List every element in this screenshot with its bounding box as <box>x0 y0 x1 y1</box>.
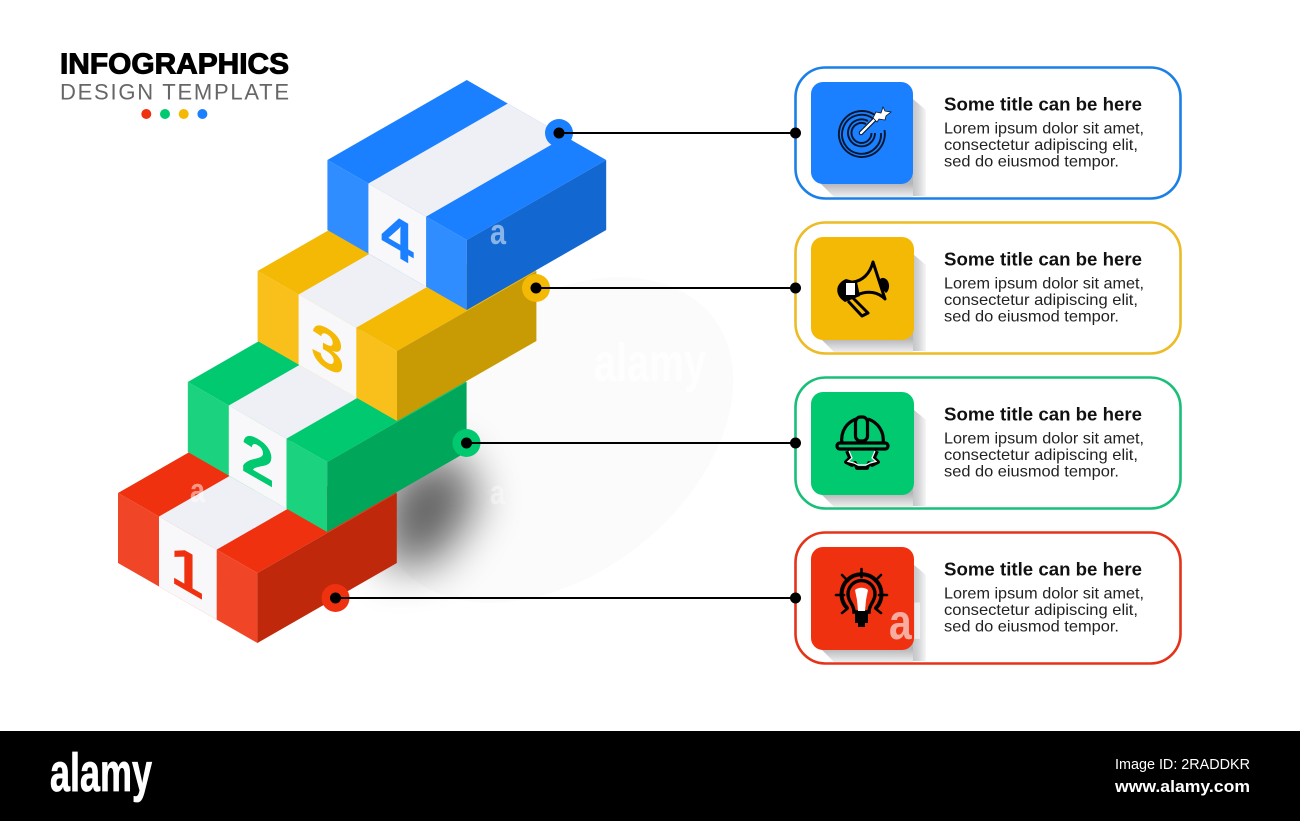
connector: step 2 <box>452 429 801 457</box>
connector: step 1 <box>322 584 801 612</box>
number 2: 2 <box>241 419 274 501</box>
number 3: 3 <box>311 308 344 391</box>
background shadow of stairs <box>314 210 796 670</box>
icon tile: megaphone <box>811 237 914 340</box>
card 2 body text <box>944 430 1144 480</box>
colour dots <box>141 109 207 119</box>
icon tile: helmet and gear <box>811 392 914 495</box>
card 2 title: Some title can be here <box>944 404 1142 424</box>
card 4 title: Some title can be here <box>944 94 1142 114</box>
icon tile: target <box>811 82 913 184</box>
card 1 body text: Lorem ipsum dolor sit amet, <box>944 586 1144 602</box>
panel: card 4 blue <box>796 68 1180 198</box>
card 3 body text: consectetur adipiscing elit, <box>944 292 1138 309</box>
card 3 body text <box>944 276 1144 326</box>
card 2 body text: Lorem ipsum dolor sit amet, <box>944 430 1144 448</box>
card 2 body text: sed do eiusmod tempor. <box>944 464 1119 480</box>
stair block 3: yellow <box>258 191 536 421</box>
tile shadow <box>813 394 926 507</box>
watermark letters on stairs: a <box>490 474 506 512</box>
tile shadow <box>813 549 926 662</box>
card 3 body text: sed do eiusmod tempor. <box>944 308 1119 326</box>
tile shadow <box>813 84 926 197</box>
card 4 body text: consectetur adipiscing elit, <box>944 137 1138 154</box>
panel: card 3 yellow <box>796 222 1180 354</box>
connector: step 3 <box>522 274 801 302</box>
title block <box>60 48 289 119</box>
card 3 title: Some title can be here <box>944 248 1142 270</box>
stair block 4: blue <box>327 80 606 310</box>
card 2 body text: consectetur adipiscing elit, <box>944 447 1138 464</box>
watermark letters on stairs: alamy <box>594 333 706 393</box>
watermark letters on stairs <box>190 211 706 512</box>
card 4 body text: sed do eiusmod tempor. <box>944 154 1119 170</box>
card 4 body text <box>944 120 1144 170</box>
watermark letters on stairs: a <box>190 472 206 510</box>
image id: Image ID: 2RADDKR <box>1115 757 1250 773</box>
number 4: 4 <box>381 197 414 279</box>
footer logo: alamy <box>50 743 152 803</box>
number 1: 1 <box>170 531 204 613</box>
subheading: design template: DESIGN TEMPLATE <box>60 80 289 104</box>
panel: card 2 green <box>796 378 1180 508</box>
tile shadow <box>813 239 926 352</box>
connector: step 4 <box>545 119 801 147</box>
watermark letters on stairs: a <box>490 211 507 252</box>
card 1 title: Some title can be here <box>944 558 1142 580</box>
card 1 body text: consectetur adipiscing elit, <box>944 602 1138 619</box>
stair block 1: red <box>118 413 397 643</box>
icon tile: light bulb <box>811 547 914 650</box>
card 1 body text: sed do eiusmod tempor. <box>944 618 1119 636</box>
card 1 body text <box>944 586 1144 636</box>
stair block 2: green <box>188 302 467 532</box>
card 3 body text: Lorem ipsum dolor sit amet, <box>944 276 1144 292</box>
panel: card 1 red <box>796 532 1180 664</box>
heading: infographics: INFOGRAPHICS <box>60 48 289 80</box>
card 4 body text: Lorem ipsum dolor sit amet, <box>944 120 1144 138</box>
watermark letters on card 1: al <box>889 594 923 650</box>
footer bar <box>0 731 1300 821</box>
website: www.alamy.com <box>1114 778 1250 796</box>
